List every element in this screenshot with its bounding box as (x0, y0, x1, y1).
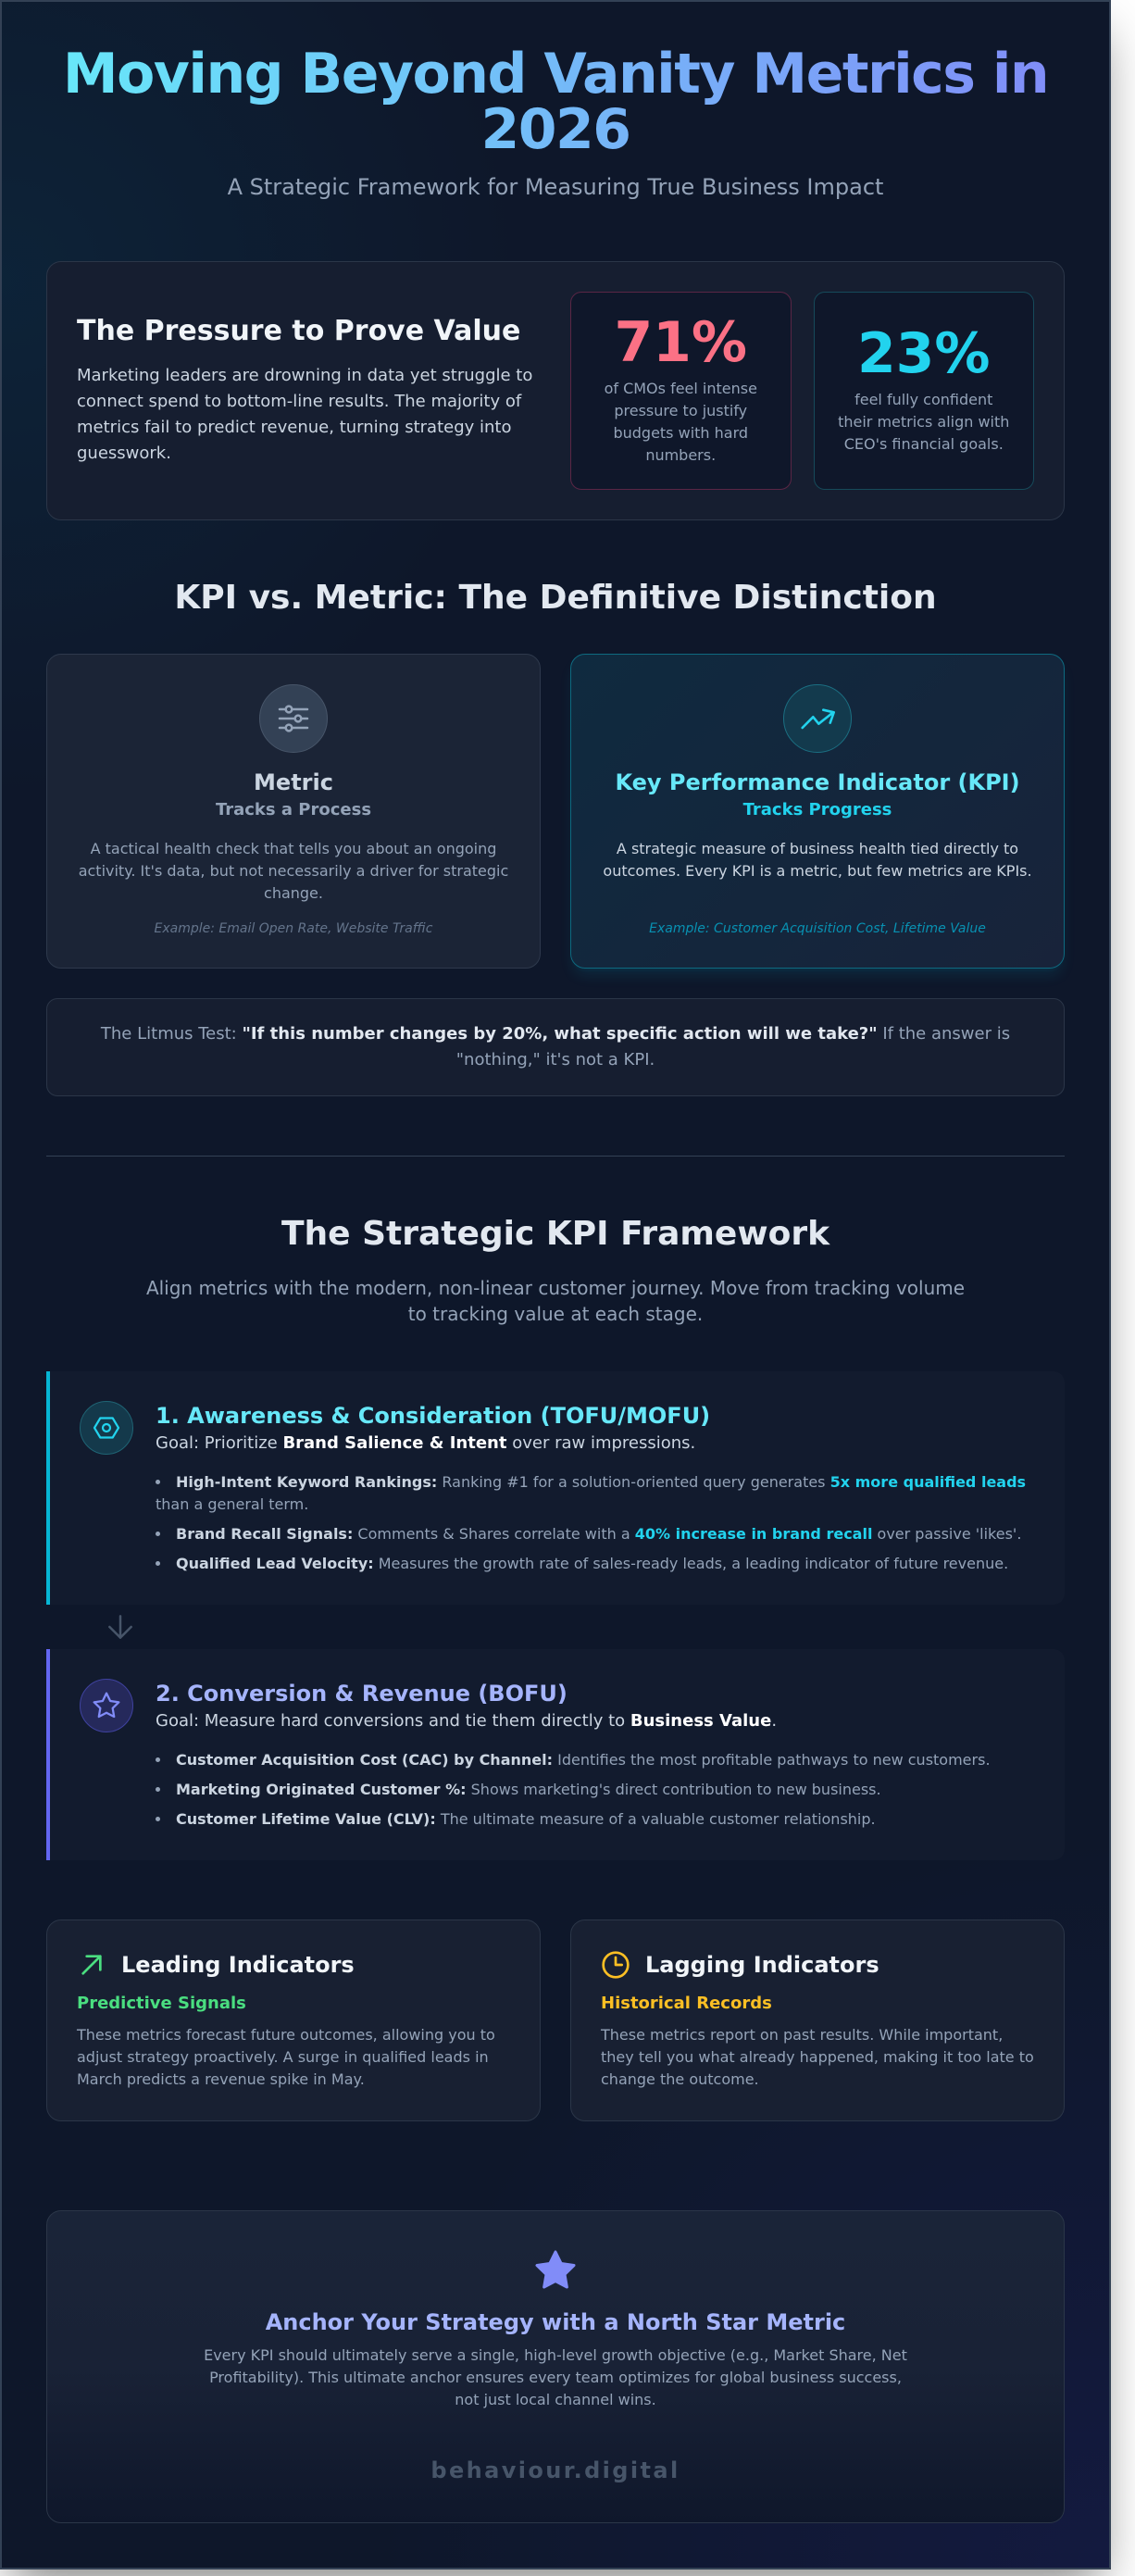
stat cards (570, 292, 1034, 490)
callout: litmus test: "nothing," it's not a KPI. (456, 1050, 655, 1069)
KPI description: A strategic measure of business health tied directly to (617, 840, 1018, 857)
metric description: A tactical health check that tells you about an ongoing (91, 840, 496, 857)
stat label: CEO's financial goals. (844, 435, 1004, 453)
lagging description (600, 2026, 1034, 2088)
stat label (838, 391, 1009, 453)
panel: the pressure to prove value (46, 261, 1065, 520)
stage 2 title: 2. Conversion & Revenue (BOFU) (156, 1681, 568, 1707)
indicator cards (46, 1919, 1065, 2121)
hero paragraph: metrics fail to predict revenue, turning strategy into (77, 418, 511, 437)
hero paragraph: guesswork. (77, 444, 171, 463)
KPI example: Example: Customer Acquisition Cost, Lifetime Value (649, 921, 986, 936)
north star paragraph: Every KPI should ultimately serve a single, high-level growth objective (e.g., Market Share, Net (204, 2346, 907, 2364)
stage 1 KPI list: Qualified Lead Velocity: Measures the growth rate of sales-ready leads, a leading indicator of future revenue. (176, 1555, 1008, 1572)
callout: litmus test (46, 998, 1065, 1096)
icon: star (80, 1679, 133, 1732)
icon: trending up (783, 684, 852, 753)
KPI description: outcomes. Every KPI is a metric, but few metrics are KPIs. (603, 862, 1032, 880)
KPI description (603, 840, 1032, 880)
stage 2 KPI list (156, 1751, 991, 1828)
leading description: March predicts a revenue spike in May. (77, 2070, 365, 2088)
stage 2 KPI list: Customer Lifetime Value (CLV): The ultimate measure of a valuable customer relationship. (176, 1810, 876, 1828)
north star paragraph (204, 2346, 907, 2408)
KPI subtitle: Tracks Progress (743, 800, 892, 819)
metric subtitle: Tracks a Process (216, 800, 371, 819)
metric description (79, 840, 508, 902)
panel: metric (46, 654, 541, 969)
panel: stage 2 conversion (46, 1649, 1065, 1860)
lagging subtitle: Historical Records (601, 1994, 772, 2013)
leading description (76, 2026, 495, 2088)
panel: KPI (570, 654, 1065, 969)
north star paragraph: Profitability). This ultimate anchor ensures every team optimizes for global business success, (209, 2369, 902, 2386)
hero paragraph: Marketing leaders are drowning in data yet struggle to (77, 366, 532, 385)
lagging description: change the outcome. (601, 2070, 759, 2088)
stat label: numbers. (645, 446, 716, 464)
panel: stage 1 awareness (46, 1371, 1065, 1605)
lagging description: they tell you what already happened, making it too late to (601, 2048, 1034, 2066)
stage 1 goal: Goal: Prioritize Brand Salience & Intent over raw impressions. (156, 1433, 695, 1453)
stage 1 KPI list: Brand Recall Signals: Comments & Shares correlate with a 40% increase in brand recall over passive 'likes'. (176, 1525, 1021, 1543)
stat label: feel fully confident (854, 391, 992, 408)
hero heading: The Pressure to Prove Value (77, 315, 520, 347)
panel: north star metric (46, 2210, 1065, 2523)
metric description: activity. It's data, but not necessarily a driver for strategic (79, 862, 508, 880)
comparison cards (46, 654, 1065, 976)
stage 1 title: 1. Awareness & Consideration (TOFU/MOFU) (156, 1403, 710, 1429)
panel: leading indicators (46, 1919, 541, 2121)
stat number: 71% (614, 310, 747, 375)
hero text block (77, 315, 532, 463)
north star paragraph: not just local channel wins. (455, 2391, 656, 2408)
section heading: strategic KPI framework: The Strategic KPI Framework (281, 1215, 829, 1253)
metric title: Metric (254, 769, 333, 795)
icon: hexagon (80, 1401, 133, 1455)
stat label: of CMOs feel intense (605, 380, 757, 397)
hero paragraph: connect spend to bottom-line results. The majority of (77, 392, 521, 411)
section intro: to tracking value at each stage. (408, 1303, 703, 1325)
stat label: their metrics align with (838, 413, 1009, 431)
callout: litmus test: The Litmus Test: "If this number changes by 20%, what specific action will we take?" If the answer is (101, 1024, 1010, 1044)
stat number: 23% (857, 321, 991, 386)
stat: 71% (570, 292, 791, 490)
lagging description: These metrics report on past results. While important, (601, 2026, 1003, 2044)
stat label: budgets with hard (613, 424, 748, 442)
section heading: KPI vs metric: KPI vs. Metric: The Definitive Distinction (174, 579, 937, 617)
stage 2 KPI list: Marketing Originated Customer %: Shows marketing's direct contribution to new business. (176, 1781, 881, 1798)
stat: 23% (813, 292, 1034, 490)
title: Moving Beyond Vanity Metrics in 2026 (63, 42, 1048, 162)
stat label: pressure to justify (614, 402, 747, 419)
stage 1 KPI list: High-Intent Keyword Rankings: Ranking #1 for a solution-oriented query generates 5x more qualified leads than a general term. (156, 1473, 1026, 1513)
leading description: adjust strategy proactively. A surge in qualified leads in (77, 2048, 489, 2066)
north star heading: Anchor Your Strategy with a North Star Metric (266, 2309, 845, 2335)
stage 2 KPI list: Customer Acquisition Cost (CAC) by Channel: Identifies the most profitable pathways to new customers. (176, 1751, 991, 1769)
leading subtitle: Predictive Signals (77, 1994, 246, 2013)
subtitle: A Strategic Framework for Measuring True Business Impact (228, 174, 883, 200)
panel: lagging indicators (570, 1919, 1065, 2121)
metric example: Example: Email Open Rate, Website Traffic (155, 921, 432, 936)
stat label (605, 380, 757, 464)
lagging heading with icon: Lagging Indicators (645, 1952, 879, 1978)
section intro (146, 1277, 965, 1325)
arrow: stage 1 to stage 2 (108, 1615, 132, 1639)
stage 1 KPI list (156, 1473, 1026, 1572)
metric description: change. (264, 884, 323, 902)
brand: behaviour.digital (430, 2457, 680, 2483)
hero paragraph (77, 366, 532, 463)
stage 2 goal: Goal: Measure hard conversions and tie them directly to Business Value. (156, 1711, 777, 1731)
icon: sliders (259, 684, 328, 753)
section intro: Align metrics with the modern, non-linear customer journey. Move from tracking volume (146, 1277, 965, 1299)
KPI title: Key Performance Indicator (KPI) (615, 769, 1020, 795)
icon: filled star (535, 2250, 576, 2289)
leading description: These metrics forecast future outcomes, allowing you to (77, 2026, 495, 2044)
leading heading with icon: Leading Indicators (121, 1952, 355, 1978)
